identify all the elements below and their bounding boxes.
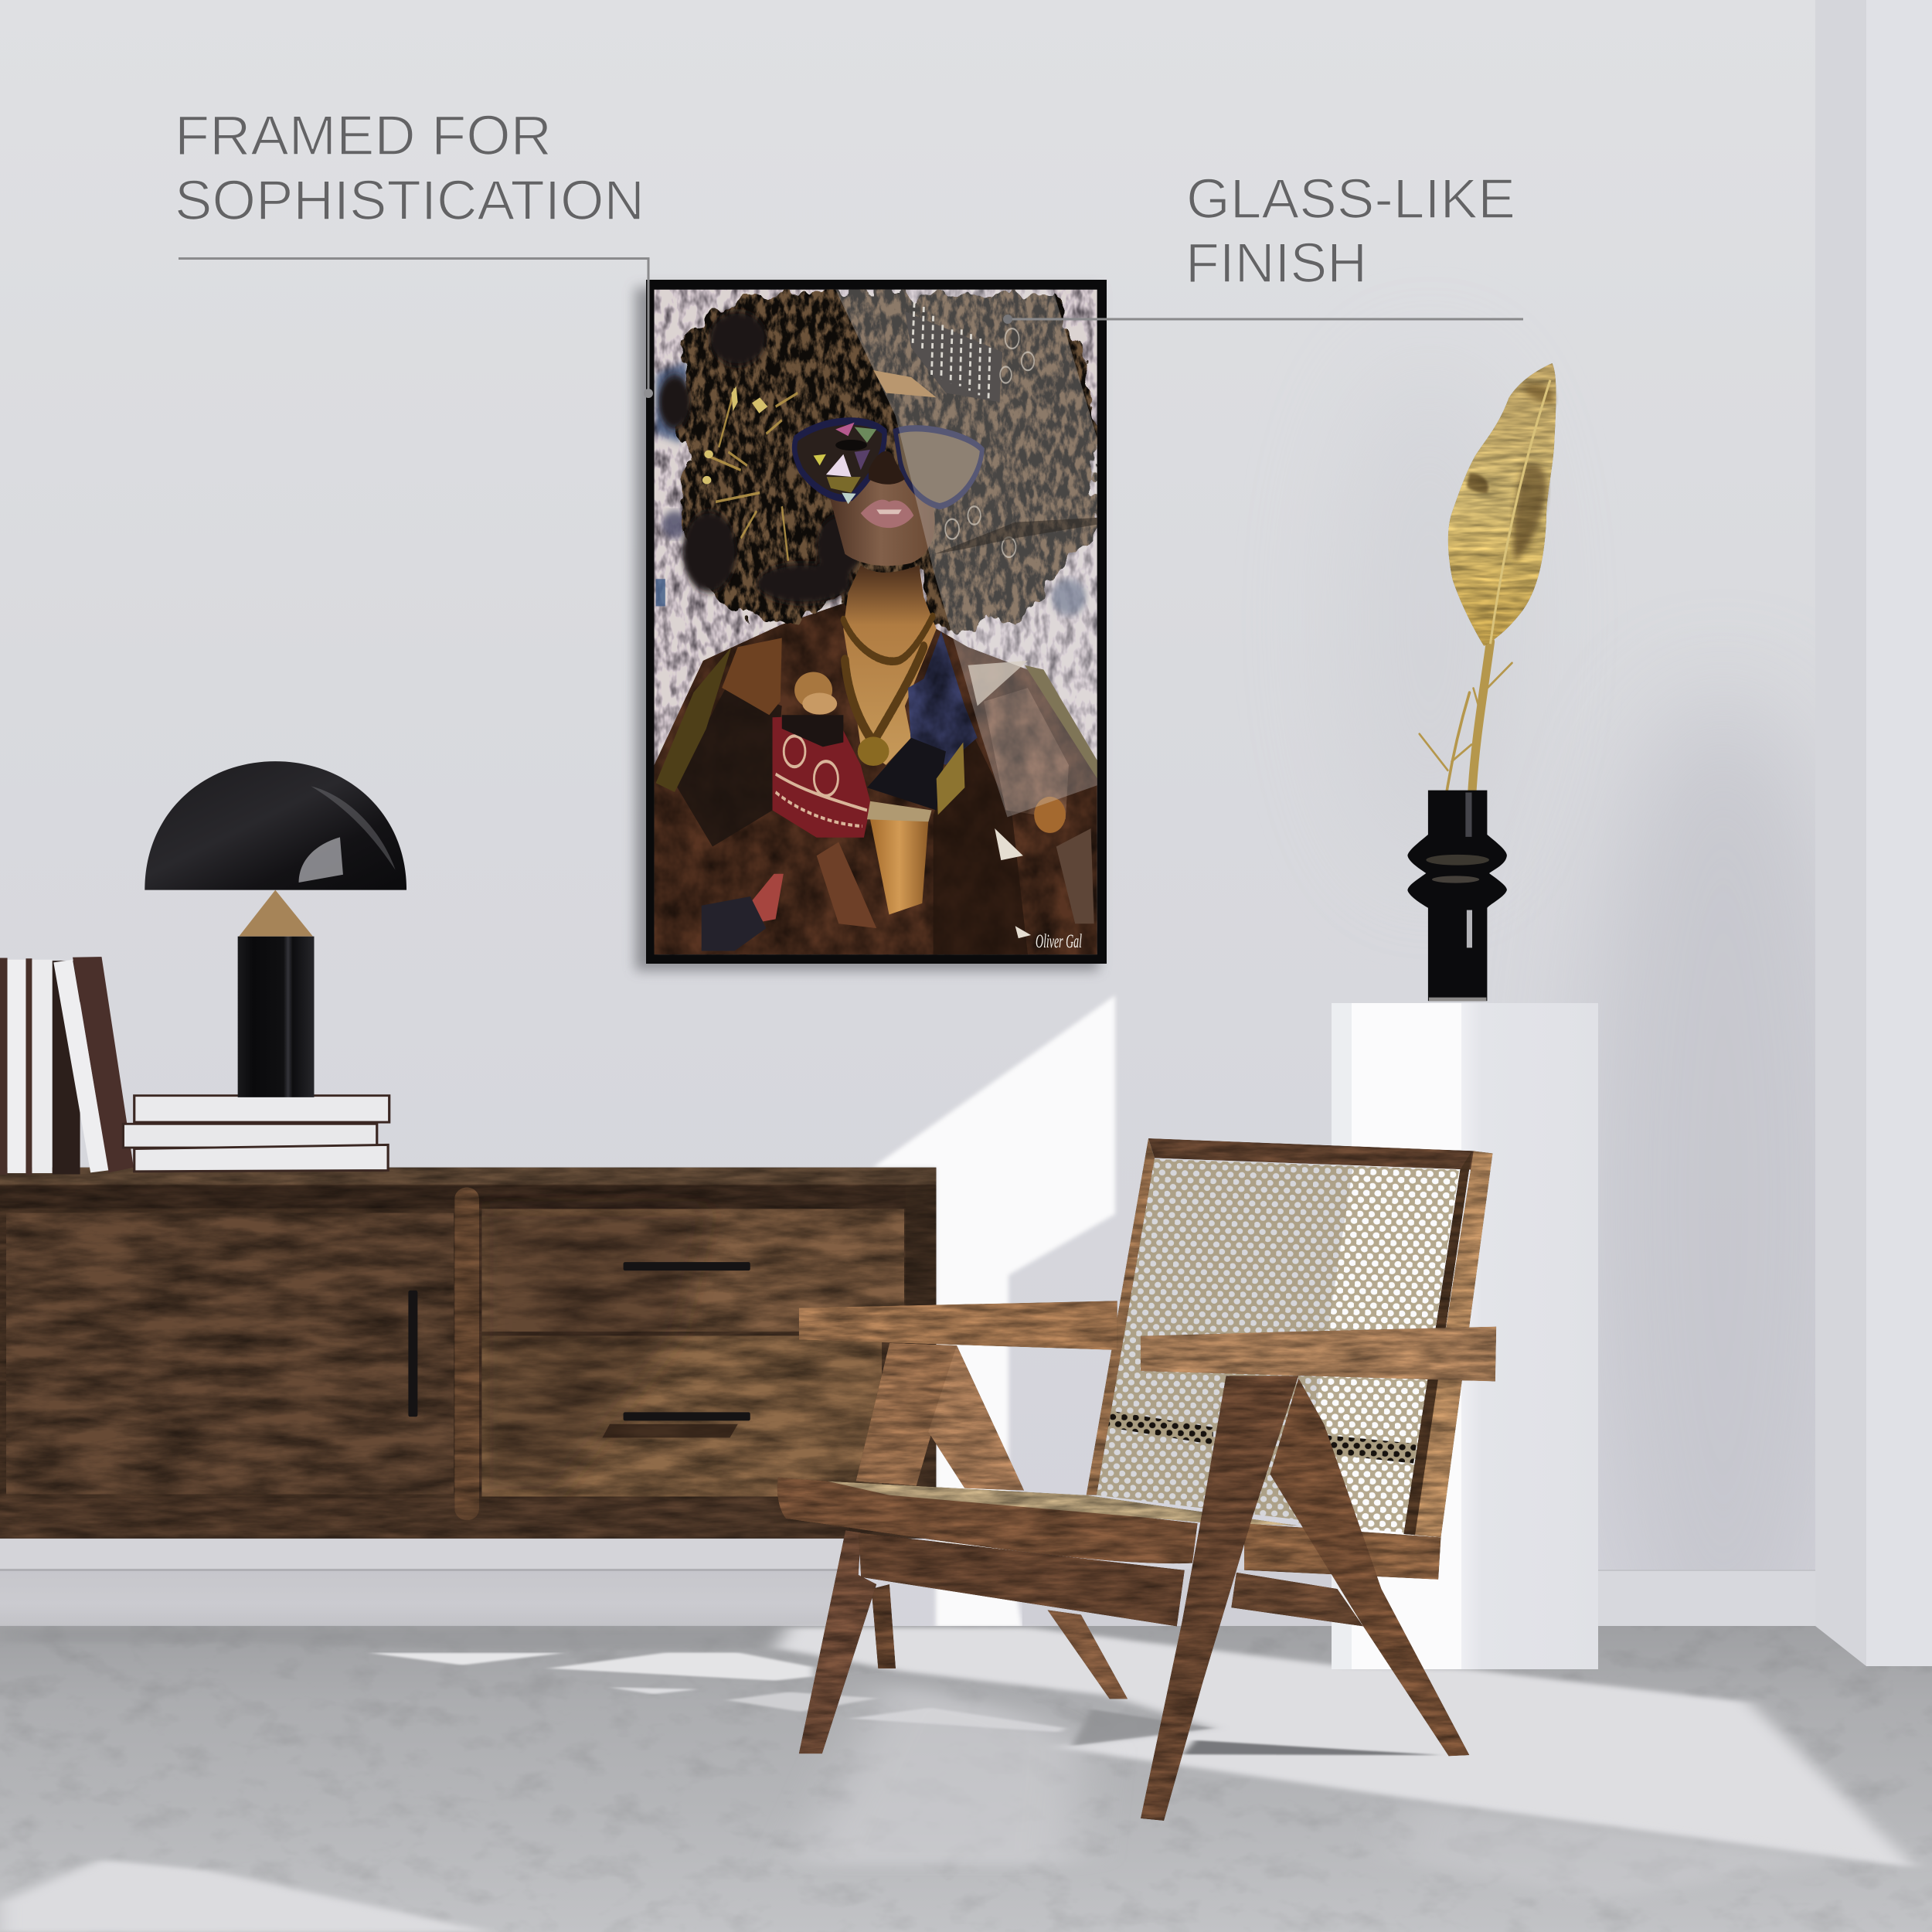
floor sunlight and shadows [0,1628,1916,1932]
brown shoulder fold [722,638,782,715]
golden leaf [1448,363,1556,646]
gold hair ornaments [709,389,798,561]
belly [870,819,928,915]
teeth [876,509,902,514]
leaf shading [1467,383,1555,562]
caption: framed for sophistication: FRAMED FOR [175,105,552,167]
shadow on drawers [481,1209,709,1497]
black frame [646,280,1107,964]
white pedestal [1332,1003,1598,1669]
framed artwork [635,280,1107,971]
gold diamonds [702,386,767,484]
gold cone [239,890,313,937]
lamp stem [238,937,314,1097]
sideboard [0,1168,936,1539]
bra lace [867,801,932,821]
leopard sleeve [656,647,731,792]
orange leather detail [1034,797,1066,833]
face skin [826,457,935,566]
rear legs [872,1584,1128,1699]
right wall pier [1815,0,1932,1666]
main front leg [1141,1376,1298,1821]
artist signature: Oliver Gal [1036,931,1082,952]
right jacket panels [984,688,1069,819]
top drawer [481,1209,904,1332]
leaf midrib [1490,380,1550,644]
vase highlights [1426,792,1489,1001]
mosaic triangles [814,423,876,504]
black vase [1407,791,1507,1001]
bandana top dark [782,715,843,747]
dark left curls [659,311,861,604]
bottom rail [0,1498,850,1537]
top drawer handle [624,1262,750,1270]
bottom drawer handle [602,1412,750,1437]
black top [867,738,946,811]
blue collar [908,631,978,765]
divider post [454,1187,479,1520]
collage paper background [655,290,1097,954]
cabinet body [0,1168,936,1539]
gold chains [843,615,934,742]
cane back panel [1097,1159,1459,1532]
afro hair [680,291,1097,630]
white paper scraps [995,828,1094,938]
front left leg [799,1530,876,1753]
left glasses lens [794,421,885,498]
hand tones [794,672,837,715]
right brace leg [1270,1378,1469,1756]
books [0,957,389,1175]
leader line: frame [179,258,653,398]
rear armrest [799,1301,1117,1350]
caption: glass-like finish: FINISH [1185,233,1367,294]
caption: glass-like finish: GLASS-LIKE [1186,168,1515,230]
upright books [0,958,80,1175]
nose [869,451,905,485]
lower rail [1231,1573,1363,1626]
frame shadow [635,287,1099,971]
neck and chest [843,566,937,765]
bottom drawer [481,1335,882,1497]
forehead tone [873,370,937,397]
bandana paisley [776,736,867,826]
leaning book [53,957,134,1172]
concrete floor [0,1626,1932,1932]
lounge chair [777,1138,1496,1821]
under-seat beam [859,1532,1185,1626]
lower paisley scarf [817,842,876,928]
dark upper sleeve [675,683,782,846]
dome shade [145,761,406,890]
back frame [1087,1138,1493,1537]
black dome lamp [145,761,406,1097]
rear left upright and brace [855,1343,1024,1491]
seat front frame [777,1478,1298,1563]
striped hat panel [905,302,1002,402]
swirl details on hair [945,328,1034,557]
front armrest [1141,1327,1496,1382]
lips [861,500,913,528]
collage portrait [655,290,1097,954]
jacket base [655,602,1097,954]
door handle [408,1291,417,1417]
caption: framed for sophistication: SOPHISTICATION [175,170,645,232]
leaf stem and twigs [1420,641,1512,791]
gold pendant [858,736,889,766]
stacked books [123,1096,389,1172]
glass reflection [835,290,1097,817]
red bandana [773,715,871,838]
rear seat rail [1244,1523,1441,1580]
yellow striped patch [937,742,964,815]
gold leaf in black vase [1407,363,1556,1001]
reflection [299,786,396,883]
dark reflected band [935,518,1097,554]
navy sleeve [702,896,766,951]
door panel [6,1213,454,1495]
dark right jacket [934,724,1028,954]
caption: framed for sophistication [175,105,645,232]
right glasses lens [896,428,982,506]
baseboard [0,1537,1815,1627]
blue paper accents [656,361,1086,615]
caption: glass-like finish [1185,168,1515,294]
sunlight patch on wall [872,995,1115,1629]
leader line: glass [1003,315,1523,324]
striped cuff [751,874,784,921]
